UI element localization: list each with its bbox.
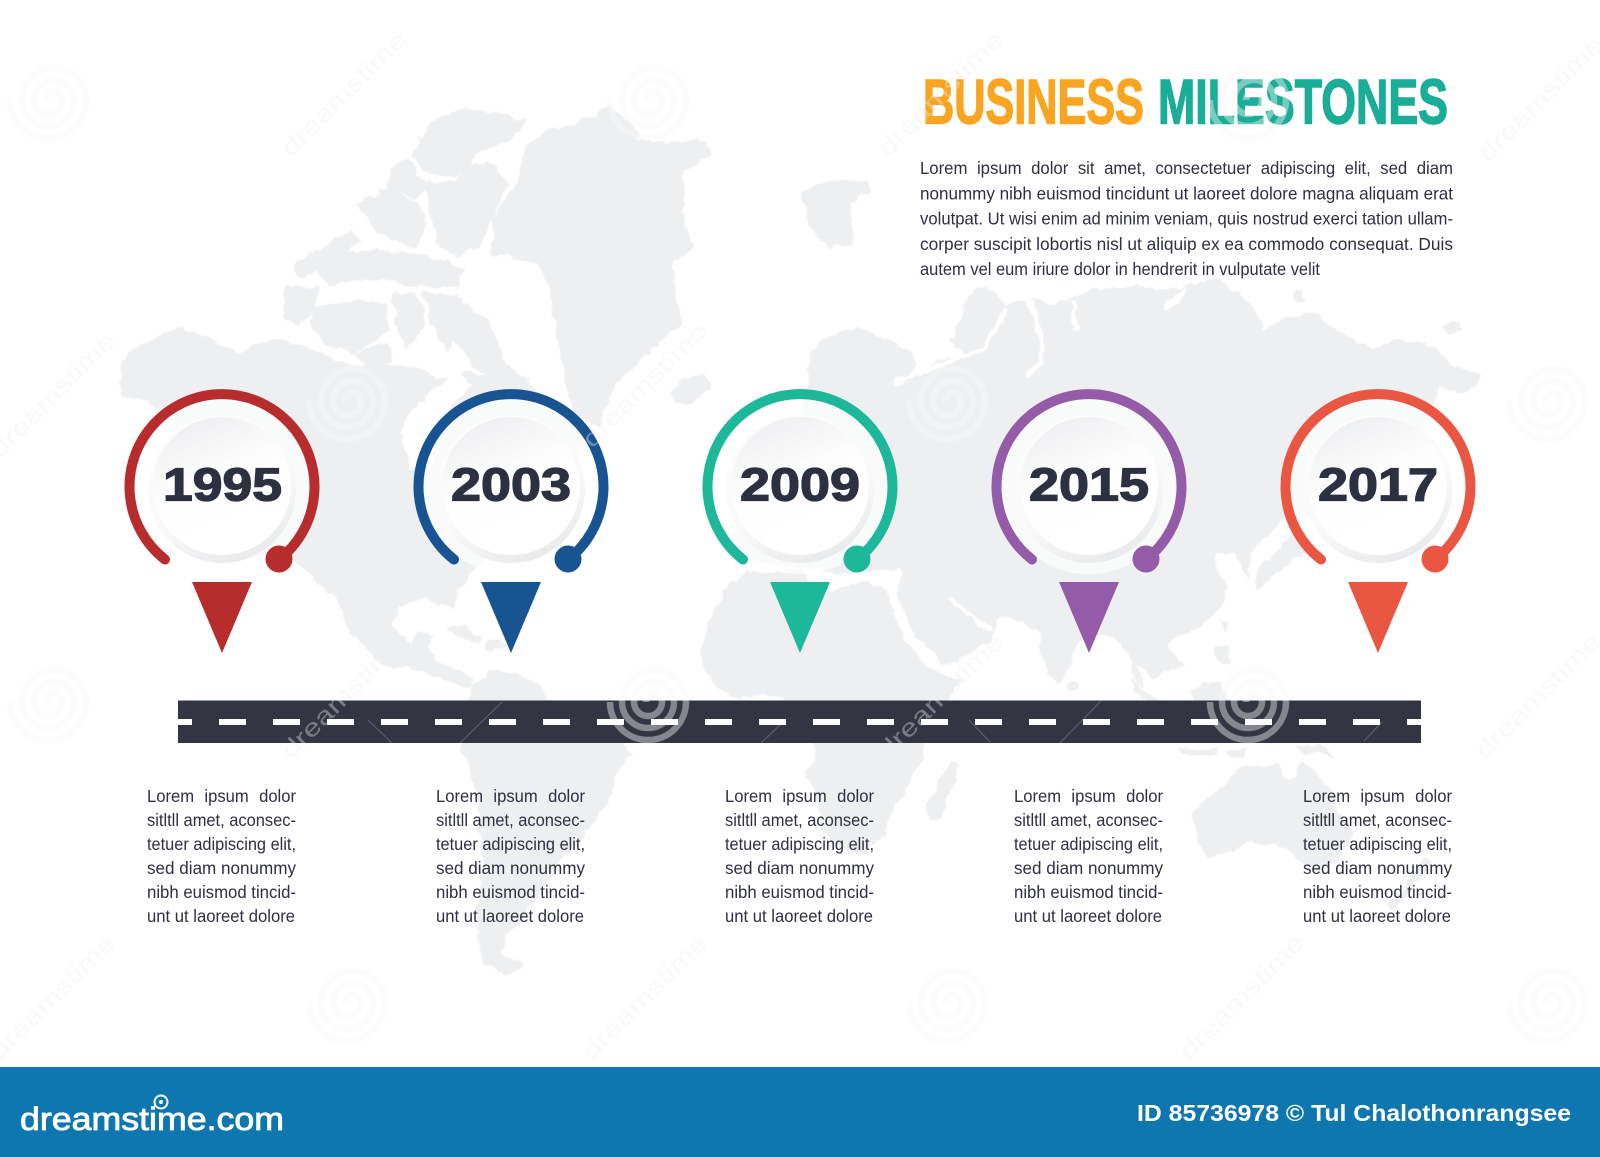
- pointer 2009: [770, 582, 830, 653]
- intro paragraph: Lorem ipsum dolor sit amet, consectetuer adipiscing elit, sed diam: [920, 158, 1453, 178]
- marker 1995: [130, 394, 315, 653]
- text block 2009: sitltll amet, aconsec-: [725, 810, 874, 830]
- text block 2009: unt ut laoreet dolore: [725, 906, 873, 926]
- intro paragraph: corper suscipit lobortis nisl ut aliquip ex ea commodo consequat. Duis: [920, 234, 1453, 254]
- text block 1995: [147, 786, 296, 926]
- map: north america: [120, 330, 590, 687]
- text block 2003: nibh euismod tincid-: [436, 882, 585, 902]
- title word: business: BUSINESS: [923, 68, 1144, 138]
- arc 1995: [130, 394, 315, 560]
- text block 2009: tetuer adipiscing elit,: [725, 834, 874, 854]
- text block 1995: tetuer adipiscing elit,: [147, 834, 296, 854]
- map: svalbard: [801, 180, 870, 247]
- text block 2003: unt ut laoreet dolore: [436, 906, 584, 926]
- text block 2015: sed diam nonummy: [1014, 858, 1163, 878]
- text block 2017: sed diam nonummy: [1303, 858, 1452, 878]
- text block 2009: Lorem ipsum dolor: [725, 786, 874, 806]
- watermark overlay: dreamstime: [1174, 929, 1310, 1065]
- map: japan: [1255, 530, 1305, 590]
- watermark overlay: dreamstime: [873, 26, 1009, 162]
- map: africa: [702, 570, 960, 853]
- text block 1995: unt ut laoreet dolore: [147, 906, 295, 926]
- intro paragraph: nonummy nibh euismod tincidunt ut laoreet dolore magna aliquam erat: [920, 183, 1453, 203]
- footer logo: dreamstime.com: [20, 1101, 284, 1137]
- map: eurasia: [735, 280, 1481, 687]
- arc 2015: [997, 394, 1182, 560]
- marker 2009: [708, 394, 893, 653]
- year 2003: 2003: [451, 458, 571, 510]
- intro paragraph: autem vel eum iriure dolor in hendrerit in vulputate velit: [920, 259, 1320, 279]
- text block 2015: sitltll amet, aconsec-: [1014, 810, 1163, 830]
- map: sri lanka: [1067, 682, 1077, 692]
- pointer 1995: [192, 582, 252, 653]
- map: cuba: [447, 625, 480, 642]
- world map background: [120, 108, 1481, 975]
- intro paragraph: [920, 158, 1453, 279]
- map: iceland: [672, 378, 710, 402]
- text block 2017: Lorem ipsum dolor: [1303, 786, 1452, 806]
- map: new zealand: [1390, 858, 1432, 912]
- watermark overlay: dreamstime: [1470, 628, 1600, 764]
- text block 1995: sed diam nonummy: [147, 858, 296, 878]
- map: greenland: [493, 108, 711, 427]
- title word: milestones: MILESTONES: [1158, 68, 1448, 138]
- watermark overlay: dreamstime: [577, 317, 713, 453]
- text block 2017: [1303, 786, 1452, 926]
- text block 1995: nibh euismod tincid-: [147, 882, 296, 902]
- dot 2017: [1422, 546, 1448, 572]
- title: [923, 68, 1448, 138]
- watermark overlay: dreamstime: [873, 628, 1009, 764]
- year 2009: 2009: [740, 458, 860, 510]
- intro paragraph: volutpat. Ut wisi enim ad minim veniam, quis nostrud exerci tation ullam-: [920, 209, 1453, 229]
- text block 1995: Lorem ipsum dolor: [147, 786, 296, 806]
- watermark overlay: dreamstime: [276, 26, 412, 162]
- text block 2015: tetuer adipiscing elit,: [1014, 834, 1163, 854]
- text block 2017: tetuer adipiscing elit,: [1303, 834, 1452, 854]
- dot 2003: [554, 546, 582, 572]
- arc 2017: [1286, 394, 1470, 560]
- text block 2003: tetuer adipiscing elit,: [436, 834, 585, 854]
- footer credit: ID 85736978 © Tul Chalothonrangsee: [1137, 1100, 1571, 1126]
- text block 2017: nibh euismod tincid-: [1303, 882, 1452, 902]
- map: arctic islands: [284, 110, 529, 383]
- road timeline: [178, 700, 1421, 743]
- text block 2015: nibh euismod tincid-: [1014, 882, 1163, 902]
- map: northern siberian islands: [1295, 290, 1461, 334]
- text block 2009: nibh euismod tincid-: [725, 882, 874, 902]
- text block 2003: Lorem ipsum dolor: [436, 786, 585, 806]
- map: hispaniola: [487, 640, 505, 650]
- watermark overlay: dreamstime: [577, 929, 713, 1065]
- text block 2017: unt ut laoreet dolore: [1303, 906, 1451, 926]
- marker 2017: [1286, 394, 1470, 653]
- year 2017: 2017: [1318, 458, 1438, 510]
- marker 2015: [997, 394, 1182, 653]
- year 2015: 2015: [1029, 458, 1149, 510]
- watermark overlay: dreamstime: [1174, 332, 1310, 468]
- dot 1995: [266, 546, 292, 572]
- dot 2015: [1132, 546, 1160, 572]
- pointer 2017: [1348, 582, 1408, 653]
- text block 2015: [1014, 786, 1163, 926]
- pointer 2015: [1059, 582, 1119, 653]
- map: madagascar: [928, 762, 957, 820]
- text block 2017: sitltll amet, aconsec-: [1303, 810, 1452, 830]
- marker 2003: [418, 394, 604, 653]
- footer bar: [0, 1067, 1600, 1157]
- year 1995: 1995: [163, 458, 282, 510]
- text block 1995: sitltll amet, aconsec-: [147, 810, 296, 830]
- text block 2015: Lorem ipsum dolor: [1014, 786, 1163, 806]
- map: australia: [1193, 762, 1353, 870]
- arc 2009: [708, 394, 893, 560]
- text block 2015: unt ut laoreet dolore: [1014, 906, 1162, 926]
- text block 2003: [436, 786, 585, 926]
- watermark overlay: dreamstime: [1473, 31, 1600, 167]
- watermark overlay: dreamstime: [276, 628, 412, 764]
- arc 2003: [418, 394, 604, 560]
- pointer 2003: [481, 582, 541, 653]
- text block 2003: sed diam nonummy: [436, 858, 585, 878]
- text block 2003: sitltll amet, aconsec-: [436, 810, 585, 830]
- dot 2009: [844, 546, 870, 572]
- map: southeast asia islands: [1133, 620, 1334, 757]
- text block 2009: [725, 786, 874, 926]
- text block 2009: sed diam nonummy: [725, 858, 874, 878]
- map: south america: [463, 670, 630, 975]
